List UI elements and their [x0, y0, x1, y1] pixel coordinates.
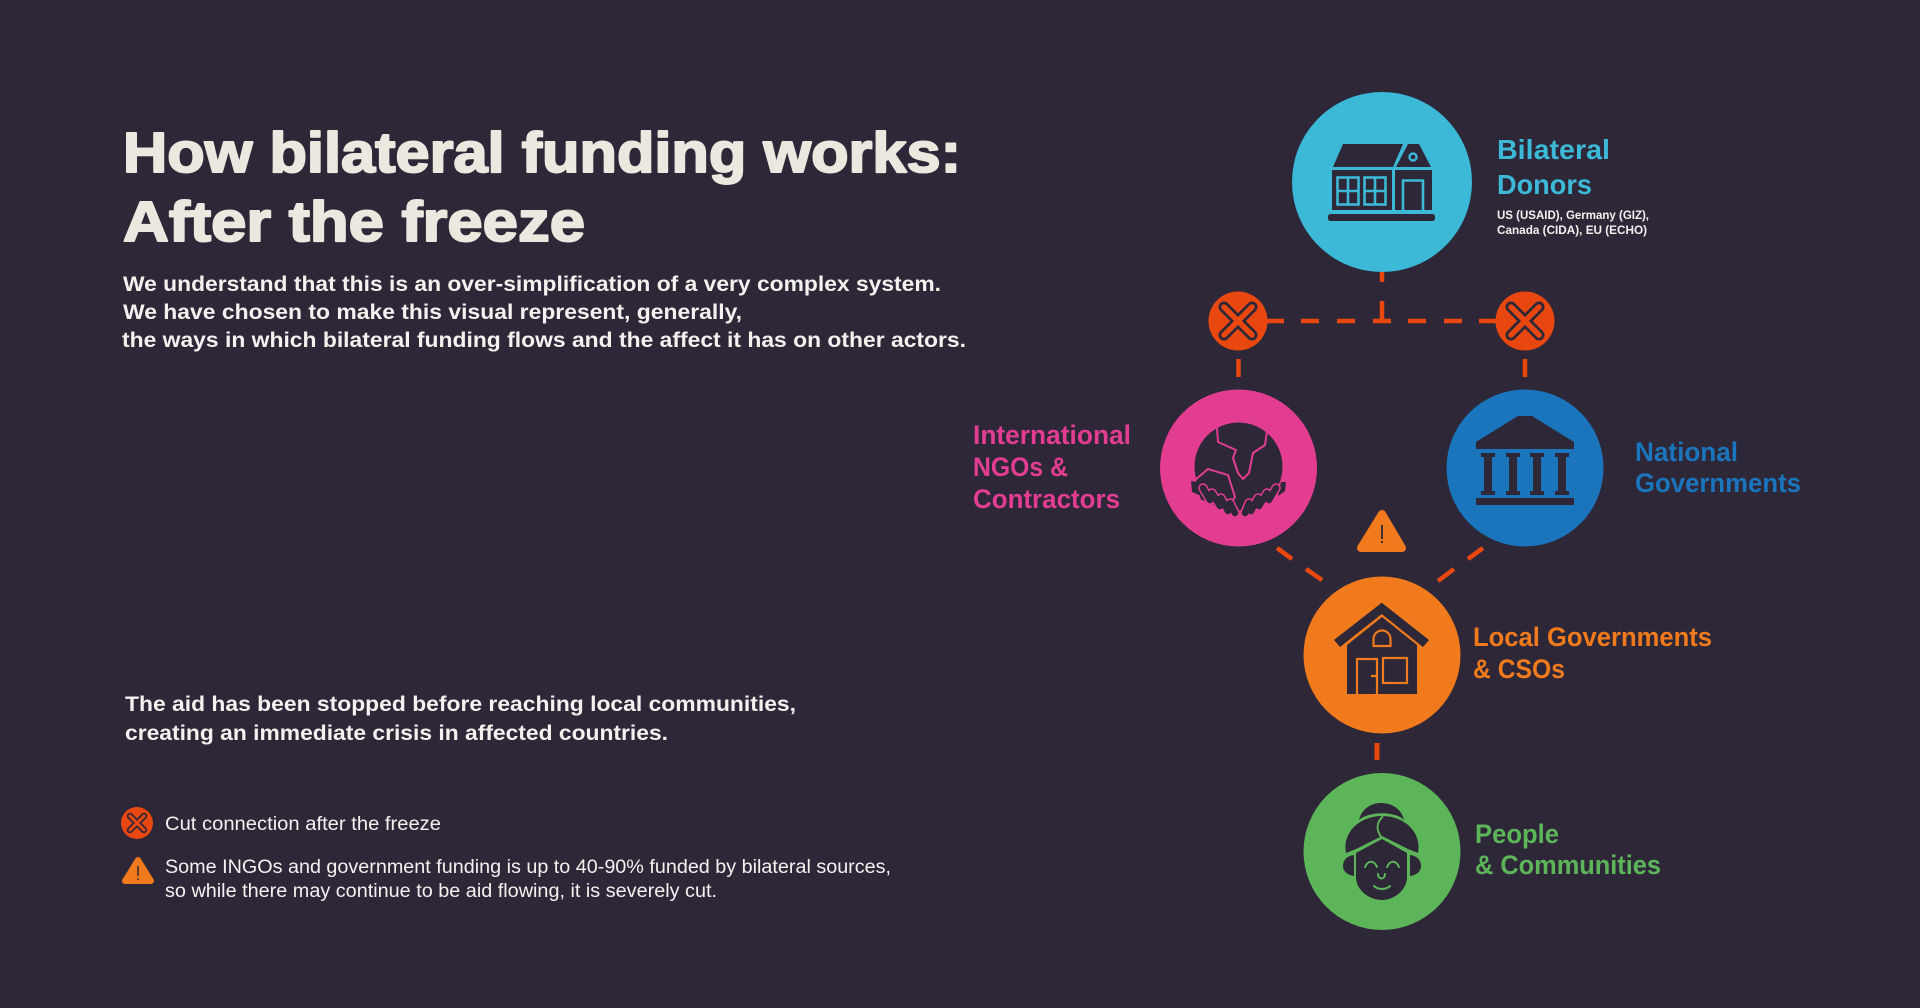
node: people and communities	[1304, 773, 1460, 930]
label: international NGOs: International	[973, 420, 1131, 450]
icon: globe and hands	[1191, 422, 1286, 513]
node: bilateral donors	[1292, 92, 1472, 272]
label: bilateral donors: Donors	[1497, 169, 1592, 200]
icon: embassy building	[1328, 144, 1435, 221]
label: people and communities: & Communities	[1475, 850, 1661, 880]
label: people and communities: People	[1475, 819, 1559, 849]
intro text: We understand that this is an over-simplification of a very complex system.	[123, 272, 941, 296]
label: national governments: National	[1635, 437, 1738, 467]
node: international NGOs	[1160, 390, 1317, 546]
title: How bilateral funding works:	[123, 121, 961, 185]
connector dashes	[1238, 272, 1525, 760]
label: donor examples: US (USAID), Germany (GIZ),	[1497, 208, 1649, 222]
intro text: We have chosen to make this visual represent, generally,	[123, 300, 742, 324]
title	[123, 121, 961, 254]
crisis statement: creating an immediate crisis in affected countries.	[125, 721, 668, 745]
intro text	[122, 272, 966, 352]
label: donor examples	[1497, 208, 1649, 237]
node: national governments	[1446, 390, 1604, 546]
label: bilateral donors: Bilateral	[1497, 134, 1610, 165]
label: international NGOs	[973, 420, 1131, 514]
legend text: warning: Some INGOs and government funding is up to 40-90% funded by bilateral sources,	[165, 857, 891, 878]
label: local governments: & CSOs	[1473, 654, 1565, 684]
crisis statement: The aid has been stopped before reaching local communities,	[125, 692, 796, 716]
icon: cut connection left	[1208, 292, 1268, 350]
legend icon: warning	[125, 860, 151, 881]
legend text: warning: so while there may continue to be aid flowing, it is severely cut.	[165, 881, 717, 902]
crisis statement	[125, 692, 796, 745]
label: local governments: Local Governments	[1473, 622, 1712, 652]
title: After the freeze	[123, 190, 585, 254]
node: local governments	[1304, 576, 1460, 734]
icon: local house	[1334, 603, 1429, 694]
legend icon: cut connection	[121, 807, 153, 839]
icon: person face	[1343, 803, 1421, 900]
icon: warning triangle	[1361, 514, 1402, 548]
icon: cut connection right	[1496, 292, 1554, 350]
label: people and communities	[1475, 819, 1661, 880]
label: national governments: Governments	[1635, 468, 1801, 498]
legend text: warning	[165, 857, 891, 902]
legend	[121, 807, 891, 902]
intro text: the ways in which bilateral funding flows and the affect it has on other actors.	[122, 328, 966, 352]
label: bilateral donors	[1497, 134, 1610, 200]
label: international NGOs: NGOs &	[973, 452, 1068, 482]
label: local governments	[1473, 622, 1712, 684]
label: donor examples: Canada (CIDA), EU (ECHO)	[1497, 223, 1647, 237]
icon: government building	[1476, 416, 1574, 505]
label: international NGOs: Contractors	[973, 484, 1120, 514]
legend text: cut connection: Cut connection after the freeze	[165, 814, 441, 835]
label: national governments	[1635, 437, 1801, 498]
